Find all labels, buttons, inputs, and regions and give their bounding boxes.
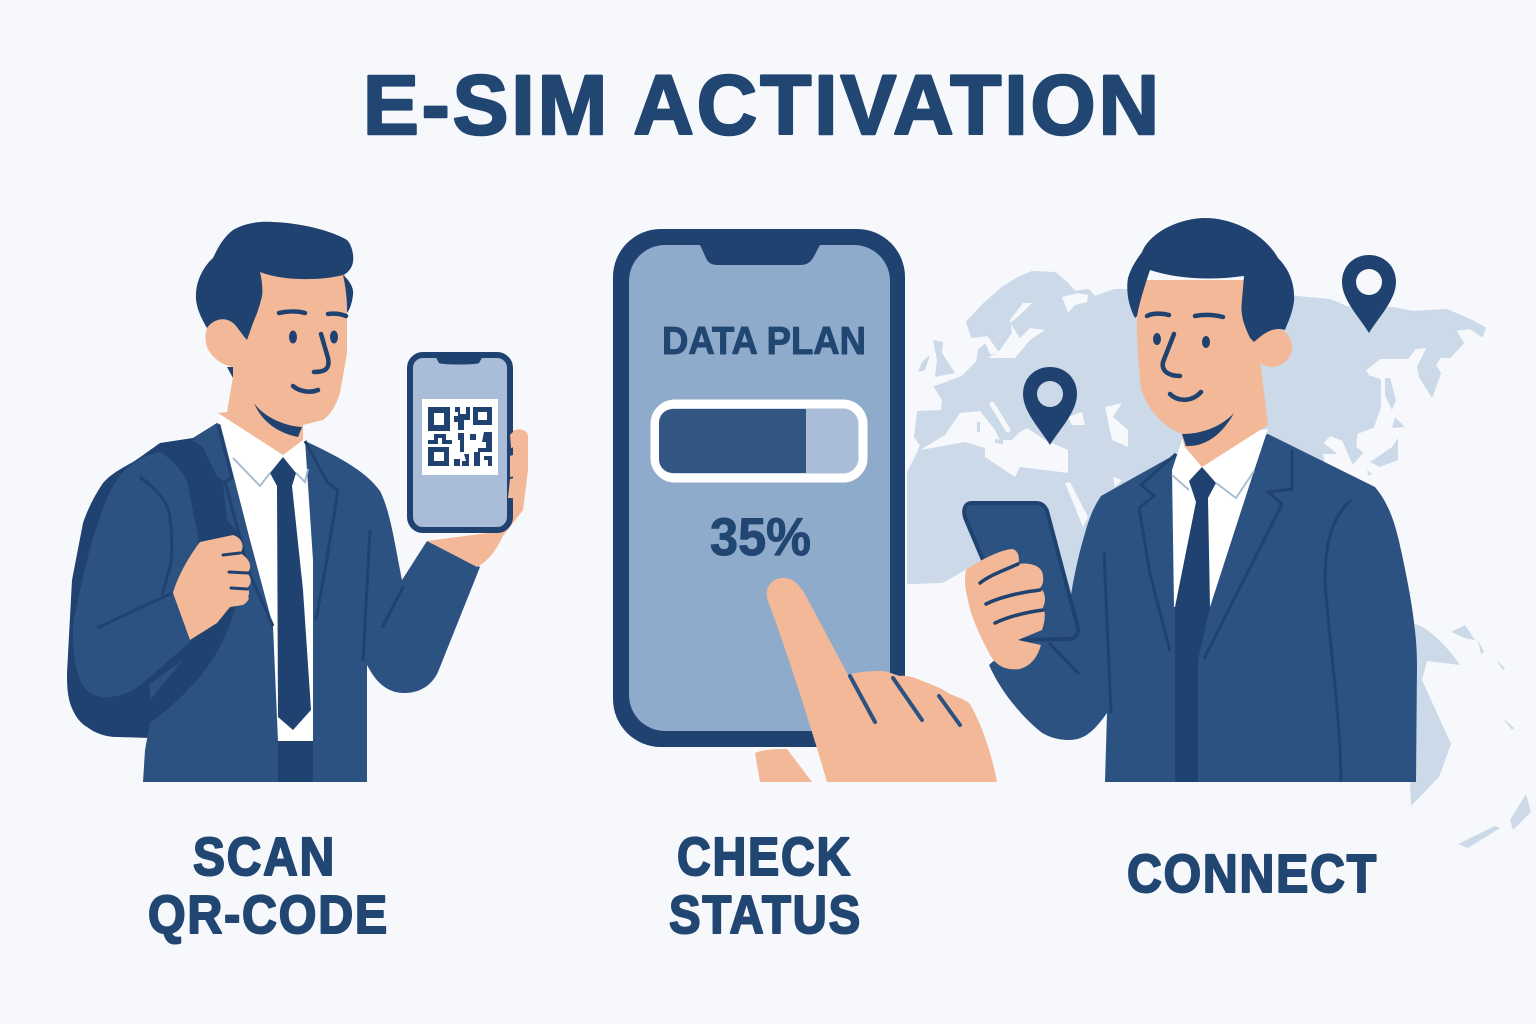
location pin: Europe (1023, 367, 1077, 445)
percentage: 35% (710, 508, 811, 567)
tie (270, 457, 311, 730)
neck shadow (227, 367, 233, 378)
hair (196, 222, 353, 340)
shirt (218, 410, 313, 741)
collar lines (233, 458, 308, 486)
neck and face (206, 268, 347, 455)
strap sliver (150, 660, 183, 700)
jacket (989, 434, 1417, 782)
label: check status (669, 827, 862, 945)
title: E-SIM ACTIVATION (363, 58, 1162, 152)
chin shadow (254, 403, 302, 437)
fist on strap (173, 535, 251, 640)
shirt (1172, 429, 1268, 607)
location pin: Asia (1342, 255, 1396, 333)
finger lines (223, 553, 248, 589)
ocean gaps (920, 293, 1128, 527)
collar lines (1172, 471, 1254, 498)
phone body (613, 229, 905, 747)
pointing hand (767, 578, 997, 782)
person: connect (964, 218, 1417, 782)
label: check status: STATUS (669, 885, 862, 945)
small phone (410, 355, 510, 530)
QR code (422, 399, 498, 475)
phone notch (700, 245, 820, 265)
jacket torso (143, 423, 480, 782)
label: scan QR-code: SCAN (193, 827, 336, 887)
eyes (1153, 333, 1210, 348)
phone notch (435, 356, 483, 364)
tie and placket (1175, 467, 1216, 782)
jacket sleeve (73, 452, 200, 697)
thumb (755, 749, 812, 782)
central phone: check status (613, 229, 997, 782)
belt (278, 741, 313, 782)
hand (965, 549, 1045, 669)
phone (964, 503, 1078, 640)
finger lines (980, 564, 1043, 623)
backpack (67, 423, 245, 738)
ear (1252, 327, 1292, 367)
lapels and seams (97, 425, 403, 661)
holding hand palm (427, 429, 528, 567)
label: scan QR-code: QR-CODE (148, 885, 389, 945)
face features (279, 312, 346, 392)
person: scan QR-code (67, 222, 528, 782)
phone screen (629, 245, 890, 731)
peninsula and island detail (918, 340, 1531, 848)
face features (1147, 314, 1223, 400)
progress bar (655, 404, 863, 478)
lapel and seam lines (1049, 450, 1351, 782)
label: check status: CHECK (677, 827, 852, 887)
chin shadow (1182, 413, 1234, 446)
screen heading: DATA PLAN (662, 320, 866, 363)
label: scan QR-code (148, 827, 389, 945)
adriatic gap (992, 404, 1008, 430)
finger lines (850, 676, 960, 725)
eyes (289, 330, 338, 344)
face and neck (1137, 280, 1268, 467)
front fingers (508, 430, 528, 498)
label: connect: CONNECT (1127, 844, 1378, 904)
background world map (908, 272, 1531, 848)
hair (1127, 218, 1294, 342)
